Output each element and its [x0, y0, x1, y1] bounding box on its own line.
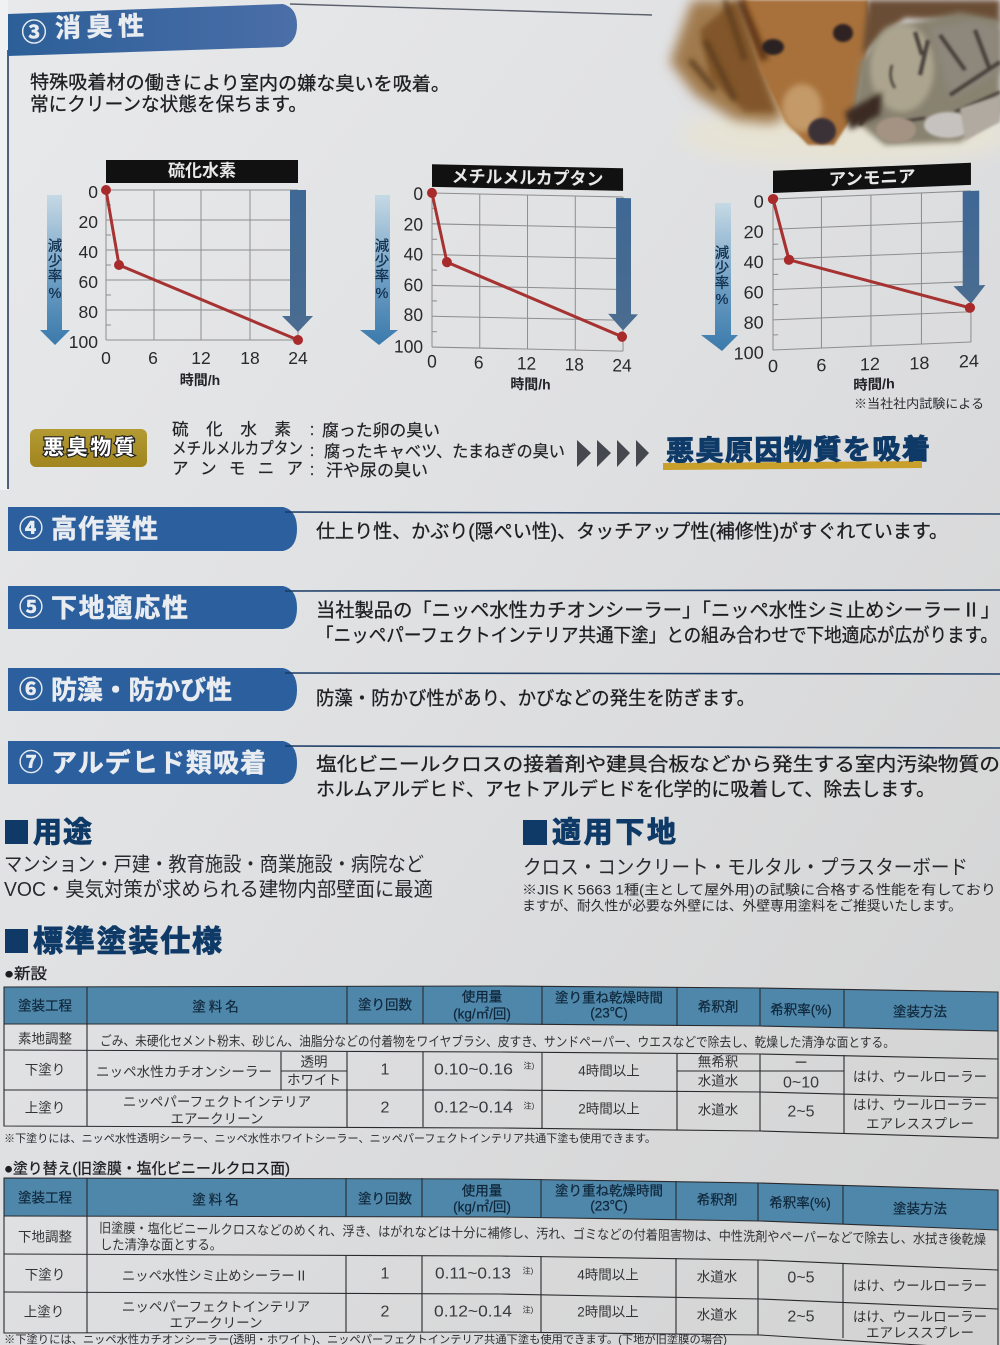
chart: hydrogen sulfide: 24 — [288, 348, 308, 368]
chart: hydrogen sulfide: 硫化水素 — [168, 162, 236, 180]
chart: methyl mercaptan: 40 — [404, 244, 423, 265]
list of odor substances: : — [310, 461, 314, 479]
table: repainting: した清浄な面とする。 — [100, 1238, 222, 1252]
chart: methyl mercaptan: 80 — [404, 304, 423, 325]
list of odor substances: 腐った卵の臭い — [322, 421, 440, 440]
chart: hydrogen sulfide: 0 — [101, 348, 111, 368]
heading: uses — [5, 816, 92, 849]
chart: hydrogen sulfide: 80 — [79, 302, 98, 322]
left arrow: chart 1 reduction rate: % — [49, 286, 62, 302]
text: applicable substrates: クロス・コンクリート・モルタル・プラスターボード — [523, 856, 968, 879]
table: repainting: 塗装工程 — [18, 1190, 72, 1206]
table: new construction: はけ、ウールローラー — [853, 1098, 987, 1112]
chart: methyl mercaptan: 0 — [427, 351, 437, 372]
chart: ammonia: 60 — [744, 282, 764, 303]
heading banner: 4 workability — [8, 507, 1000, 551]
table: new construction: 上塗り — [25, 1100, 65, 1116]
heading banner: 6 anti-algae anti-mold: ⑥ — [19, 676, 43, 704]
table: repainting: 4時間以上 — [577, 1268, 639, 1282]
chart: hydrogen sulfide: 40 — [79, 242, 98, 262]
table: new construction: エアークリーン — [170, 1112, 264, 1126]
chart: methyl mercaptan: 60 — [404, 275, 423, 295]
heading banner: 5 substrate: ⑤ — [19, 594, 43, 622]
table: new construction: ホワイト — [287, 1072, 341, 1088]
chart: hydrogen sulfide: 0 — [88, 182, 98, 202]
intro text: 常にクリーンな状態を保ちます。 — [30, 94, 307, 116]
table: repainting: はけ、ウールローラー — [853, 1310, 987, 1324]
table: repainting: (kg/㎡/回) — [453, 1200, 511, 1214]
table: new construction: ー — [794, 1056, 808, 1070]
arrows: four triangles — [577, 440, 649, 467]
list of odor substances: アンモニア — [172, 460, 303, 478]
heading: applicable substrates: 適用下地 — [552, 816, 676, 849]
photo: dog and cat on carpet — [670, 0, 1000, 165]
left arrow: chart 3 reduction rate: 率 — [715, 275, 729, 292]
left arrow: chart 3 reduction rate: % — [716, 292, 729, 308]
table: repainting: 下地調整 — [18, 1230, 72, 1244]
table: new construction: (23℃) — [590, 1006, 628, 1020]
chart: hydrogen sulfide: 100 — [69, 332, 98, 352]
text: aldehyde adsorption: ホルムアルデヒド、アセトアルデヒドを化学的に吸着して、除去します。 — [316, 778, 935, 800]
chart: ammonia: 6 — [816, 355, 827, 375]
chart: hydrogen sulfide: 時間/h — [180, 372, 220, 388]
table: repainting: 2 — [381, 1304, 390, 1320]
chart: hydrogen sulfide: 20 — [79, 212, 98, 232]
table: new construction — [4, 986, 998, 1138]
left arrow: chart 1 reduction rate — [40, 195, 70, 345]
table: new construction: 0.12~0.14 — [434, 1100, 513, 1116]
table: repainting: (23℃) — [590, 1198, 628, 1214]
left arrow: chart 1 reduction rate: 率 — [48, 268, 62, 285]
left arrow: chart 2 reduction rate: 率 — [375, 268, 389, 285]
table: repainting: 1 — [381, 1266, 390, 1282]
chart: ammonia: 0 — [768, 356, 778, 376]
chart: ammonia: 時間/h — [853, 375, 895, 394]
label: new construction: ●新設 — [4, 966, 47, 982]
text: substrate: 当社製品の「ニッペ水性カチオンシーラー」「ニッペ水性シミ止めシーラーⅡ」 — [316, 600, 1000, 622]
table: repainting: 塗り重ね乾燥時間 — [555, 1184, 663, 1198]
chart: methyl mercaptan: 18 — [565, 354, 584, 375]
table: new construction: 素地調整 — [18, 1032, 72, 1046]
chart: ammonia: 20 — [744, 222, 764, 242]
table: new construction: ごみ、未硬化セメント粉末、砂じん、油脂分などの付着物をワイヤブラシ、皮すき、サンドペーパー、ウエスなどで除去し、乾燥した清浄な面とする。 — [100, 1033, 895, 1050]
table: repainting: 希釈剤 — [697, 1192, 737, 1208]
table: repainting: 希釈率(%) — [769, 1196, 831, 1210]
chart: ammonia: 18 — [909, 353, 930, 374]
text: aldehyde adsorption — [316, 754, 1000, 800]
chart: hydrogen sulfide: 18 — [240, 348, 260, 368]
table: new construction: 0.10~0.16 — [434, 1062, 513, 1078]
table: repainting: エアークリーン — [169, 1316, 263, 1330]
table: new construction: 2時間以上 — [578, 1102, 640, 1116]
text: uses — [4, 853, 433, 901]
table: new construction: ニッペ水性カチオンシーラー — [96, 1064, 272, 1080]
list of odor substances: : — [310, 442, 314, 460]
chart: ammonia: アンモニア — [829, 166, 915, 189]
table: repainting: 塗り回数 — [358, 1192, 412, 1206]
chart: ammonia: 40 — [744, 252, 764, 273]
heading banner: 6 anti-algae anti-mold — [8, 668, 1000, 711]
table: new construction: (kg/㎡/回) — [453, 1006, 511, 1022]
table: repainting: 0.12~0.14 — [434, 1304, 512, 1320]
chart: ammonia: 100 — [734, 343, 764, 364]
heading: uses: 用途 — [33, 816, 92, 849]
intro text — [30, 72, 450, 116]
list of odor substances: 腐ったキャベツ、たまねぎの臭い — [324, 442, 565, 461]
chart: hydrogen sulfide — [69, 160, 313, 388]
table: new construction: 透明 — [300, 1054, 328, 1070]
text: uses: VOC・臭気対策が求められる建物内部壁面に最適 — [4, 878, 433, 901]
label: repainting: ●塗り替え(旧塗膜・塩化ビニールクロス面) — [4, 1160, 290, 1178]
section frame lines — [8, 4, 652, 489]
table: new construction: 希釈率(%) — [770, 1002, 832, 1018]
chart: methyl mercaptan: 12 — [517, 353, 536, 374]
left arrow: chart 2 reduction rate: 少 — [375, 253, 389, 270]
table: new construction: 塗装方法 — [893, 1004, 947, 1020]
table: repainting: はけ、ウールローラー — [853, 1278, 987, 1294]
table: new construction: 2 — [381, 1100, 390, 1116]
chart: hydrogen sulfide: 6 — [148, 348, 158, 368]
chart: hydrogen sulfide: 60 — [79, 272, 98, 292]
table: new construction: 水道水 — [698, 1102, 739, 1118]
chart: ammonia: 0 — [754, 192, 764, 212]
table: repainting: 0~5 — [787, 1270, 815, 1286]
left arrow: chart 2 reduction rate: 減 — [375, 238, 390, 255]
table: repainting: 0.11~0.13 — [435, 1266, 511, 1282]
table: new construction: 1 — [381, 1062, 390, 1078]
text: applicable substrates — [522, 856, 996, 914]
table: repainting: 2時間以上 — [577, 1304, 639, 1320]
table: repainting: エアレススプレー — [866, 1326, 974, 1340]
table: repainting — [4, 1178, 998, 1345]
left arrow: chart 2 reduction rate — [360, 195, 398, 345]
table: repainting: ニッペ水性シミ止めシーラーⅡ — [122, 1268, 308, 1284]
chart: ammonia: 12 — [860, 354, 880, 375]
table: new construction: はけ、ウールローラー — [853, 1070, 987, 1084]
table: new construction: 使用量 — [462, 988, 502, 1004]
chart: methyl mercaptan — [394, 163, 638, 394]
text: aldehyde adsorption: 塩化ビニールクロスの接着剤や建具合板などから発生する室内汚染物質の — [316, 754, 1000, 776]
left arrow: chart 3 reduction rate — [701, 203, 738, 351]
heading banner: 7 aldehyde adsorption: ⑦ — [19, 750, 43, 776]
table: new construction: 塗料名 — [192, 1000, 242, 1014]
list of odor substances: 硫化水素 — [172, 420, 291, 439]
list of odor substances — [172, 420, 565, 480]
chart: methyl mercaptan: 時間/h — [510, 375, 551, 393]
list of odor substances: 汗や尿の臭い — [326, 461, 428, 480]
footnote: in-house test: ※当社社内試験による — [854, 396, 984, 411]
table: new construction: 注) — [524, 1060, 535, 1070]
heading banner: 3 deodorizing: 消臭性 — [55, 11, 144, 43]
heading: standard coating specification: 標準塗装仕様 — [33, 926, 222, 958]
table: repainting: ニッペパーフェクトインテリア — [122, 1300, 310, 1314]
table: repainting: 水道水 — [697, 1270, 738, 1284]
chart: ammonia — [734, 162, 985, 399]
table: new construction: 希釈剤 — [698, 1000, 738, 1014]
chart: methyl mercaptan: 20 — [404, 214, 423, 235]
table: new construction: 4時間以上 — [578, 1064, 640, 1078]
chart: ammonia: 80 — [744, 312, 764, 333]
text: workability: 仕上り性、かぶり(隠ぺい性)、タッチアップ性(補修性)がすぐれています。 — [316, 520, 948, 542]
text: applicable substrates: ますが、耐久性が必要な外壁には、外壁専用塗料をご推奨いたします。 — [522, 898, 962, 914]
heading banner: 7 aldehyde adsorption — [8, 741, 1000, 784]
heading banner: 4 workability: 高作業性 — [51, 514, 158, 544]
table: repainting: 注) — [523, 1266, 534, 1276]
badge: malodorous substances: 悪臭物質 — [43, 436, 135, 460]
text: applicable substrates: ※JIS K 5663 1種(主として屋外用)の試験に合格する性能を有しており — [522, 882, 996, 898]
table: repainting: 水道水 — [697, 1308, 738, 1322]
left arrow: chart 3 reduction rate: 少 — [715, 260, 729, 277]
chart: methyl mercaptan: 6 — [474, 352, 484, 373]
badge: malodorous substances — [30, 429, 147, 467]
table: new construction: 塗り重ね乾燥時間 — [555, 990, 663, 1006]
heading banner: 6 anti-algae anti-mold: 防藻・防かび性 — [51, 675, 232, 705]
chart: hydrogen sulfide: 12 — [191, 348, 211, 368]
table: new construction: 塗装工程 — [18, 998, 72, 1014]
chart: methyl mercaptan: 24 — [612, 355, 632, 376]
left arrow: chart 3 reduction rate: 減 — [715, 245, 730, 262]
chart: methyl mercaptan: 0 — [413, 183, 423, 204]
left arrow: chart 1 reduction rate: 減 — [48, 238, 63, 255]
table: new construction: 下塗り — [25, 1062, 65, 1078]
note: table 1: ※下塗りには、ニッペ水性透明シーラー、ニッペ水性ホワイトシーラー、ニッペパーフェクトインテリア共通下塗も使用できます。 — [4, 1131, 656, 1145]
text: uses: マンション・戸建・教育施設・商業施設・病院など — [4, 853, 424, 876]
table: repainting: 塗装方法 — [893, 1202, 947, 1216]
chart: ammonia: 24 — [959, 351, 979, 371]
callout: adsorbs malodor sources: 悪臭原因物質を吸着 — [666, 434, 930, 466]
table: new construction: エアレススプレー — [866, 1116, 974, 1132]
table: repainting: 塗料名 — [192, 1192, 242, 1208]
chart: methyl mercaptan: 100 — [394, 336, 423, 357]
list of odor substances: メチルメルカプタン — [172, 439, 303, 458]
heading banner: 5 substrate — [8, 586, 1000, 629]
text: substrate — [316, 600, 1000, 646]
heading banner: 4 workability: ④ — [19, 516, 43, 542]
table: new construction: 塗り回数 — [358, 998, 412, 1012]
table: new construction: 水道水 — [698, 1074, 739, 1088]
heading banner: 7 aldehyde adsorption: アルデヒド類吸着 — [51, 748, 266, 778]
table: new construction: 2~5 — [787, 1104, 815, 1120]
table: repainting: 上塗り — [24, 1304, 64, 1320]
table: repainting: 使用量 — [462, 1182, 502, 1198]
heading banner: 3 deodorizing — [8, 4, 297, 56]
intro text: 特殊吸着材の働きにより室内の嫌な臭いを吸着。 — [30, 72, 450, 96]
left arrow: chart 2 reduction rate: % — [376, 286, 389, 302]
table: repainting: 注) — [523, 1304, 534, 1314]
text: anti-algae anti-mold: 防藻・防かび性があり、かびなどの発生を防ぎます。 — [316, 688, 755, 710]
heading banner: 3 deodorizing: ③ — [21, 19, 47, 47]
table: new construction: ニッペパーフェクトインテリア — [123, 1094, 311, 1110]
chart: methyl mercaptan: メチルメルカプタン — [452, 166, 603, 189]
heading banner: 5 substrate: 下地適応性 — [51, 593, 188, 623]
table: repainting: 2~5 — [787, 1308, 815, 1326]
table: repainting: 下塗り — [25, 1268, 65, 1282]
list of odor substances: : — [310, 421, 314, 439]
left arrow: chart 1 reduction rate: 少 — [48, 253, 62, 270]
table: new construction: 無希釈 — [698, 1054, 739, 1070]
table: new construction: 注) — [524, 1100, 535, 1110]
table: new construction: 0~10 — [783, 1074, 819, 1092]
